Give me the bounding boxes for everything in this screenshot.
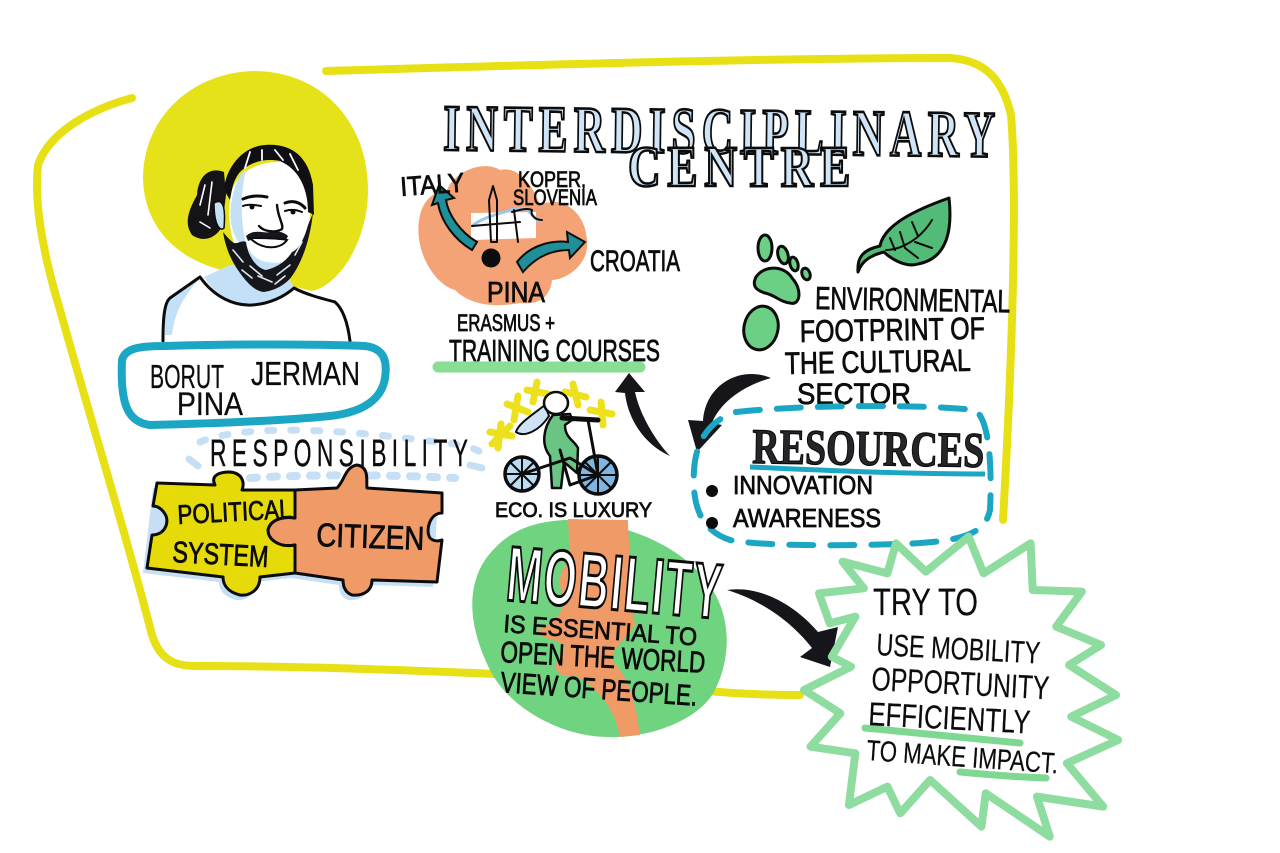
yellow frame (37, 58, 1014, 695)
orange map blob (418, 166, 587, 305)
arrow to Croatia (517, 232, 585, 272)
resources panel: RESOURCES (752, 418, 985, 478)
name box: PINA (177, 386, 244, 422)
starburst callout: OPPORTUNITY (871, 660, 1050, 706)
map panel: Pina, Koper: ERASMUS + (457, 310, 555, 337)
arrow: to training courses (615, 373, 670, 456)
puzzle pieces: POLITICAL (177, 494, 292, 530)
wheels (505, 457, 539, 491)
map panel: Pina, Koper: CROATIA (590, 245, 680, 278)
moustache and mouth (246, 231, 288, 241)
mobility heading: MOBILITY (503, 531, 725, 636)
map panel: Pina, Koper: KOPER, (518, 167, 586, 192)
responsibility heading with blue dashes: RESPONSIBILITY (210, 432, 468, 474)
face (229, 162, 310, 272)
bike frame (522, 420, 598, 485)
icon: leaf (858, 198, 950, 272)
cyclist (490, 382, 652, 522)
body (544, 414, 578, 488)
starburst callout (804, 537, 1118, 837)
green underline (438, 362, 640, 372)
neck tint (204, 264, 294, 304)
resources panel: AWARENESS (733, 503, 881, 533)
title: INTERDISCIPLINARY (443, 92, 995, 172)
name box (122, 344, 386, 425)
environmental footprint text: THE CULTURAL (785, 343, 971, 381)
Pina dot (482, 248, 500, 268)
environmental footprint text (785, 280, 1010, 411)
globe (472, 519, 727, 737)
piece: citizen (268, 465, 442, 595)
title: CENTRE (628, 136, 850, 199)
handlebar (562, 418, 598, 420)
highlights (865, 728, 1020, 743)
globe: VIEW OF PEOPLE. (500, 667, 698, 713)
arrow: mobility to starburst (727, 589, 838, 667)
yellow stars (490, 382, 612, 448)
puzzle pieces: CITIZEN (316, 516, 425, 557)
map panel: Pina, Koper: SLOVENIA (513, 185, 597, 210)
starburst callout: USE MOBILITY (876, 627, 1041, 671)
icon: footprint (740, 235, 812, 353)
beard (223, 213, 313, 292)
orange continent (535, 519, 640, 737)
ear (214, 201, 225, 229)
labels: ITALY (399, 168, 465, 202)
halo (143, 71, 368, 291)
hair (224, 145, 314, 215)
name box: BORUT (150, 358, 224, 395)
portrait of Borut Jerman (143, 71, 368, 341)
environmental footprint text: ENVIRONMENTAL (815, 280, 1010, 319)
starburst callout: TRY TO (873, 582, 978, 624)
shirt outline (163, 277, 350, 341)
resources panel (694, 406, 991, 545)
puzzle pieces: SYSTEM (172, 536, 269, 574)
map panel: Pina, Koper: PINA (487, 277, 546, 309)
piece: political system (147, 472, 295, 595)
map panel: Pina, Koper: TRAINING COURSES (449, 333, 660, 368)
puzzle pieces (143, 465, 442, 600)
arrow: to resources (688, 374, 771, 452)
cyclist: ECO. IS LUXURY (495, 499, 652, 522)
shoulder tint (165, 278, 200, 335)
head (544, 392, 568, 414)
starburst callout: EFFICIENTLY (868, 695, 1031, 740)
name box: JERMAN (251, 355, 360, 392)
environmental footprint text: SECTOR (797, 378, 911, 411)
starburst callout: TO MAKE IMPACT. (866, 735, 1059, 780)
blue shadow (143, 470, 438, 600)
resources panel: INNOVATION (733, 470, 873, 500)
environmental footprint text: FOOTPRINT OF (800, 311, 985, 349)
church sketch (471, 212, 536, 240)
map panel: Pina, Koper (399, 166, 680, 368)
globe: OPEN THE WORLD (500, 636, 706, 680)
eyes, brows and nose (243, 196, 305, 231)
hair (516, 405, 549, 434)
hair bun (188, 170, 226, 239)
globe: IS ESSENTIAL TO (503, 610, 698, 652)
arrow to Italy (432, 185, 477, 250)
